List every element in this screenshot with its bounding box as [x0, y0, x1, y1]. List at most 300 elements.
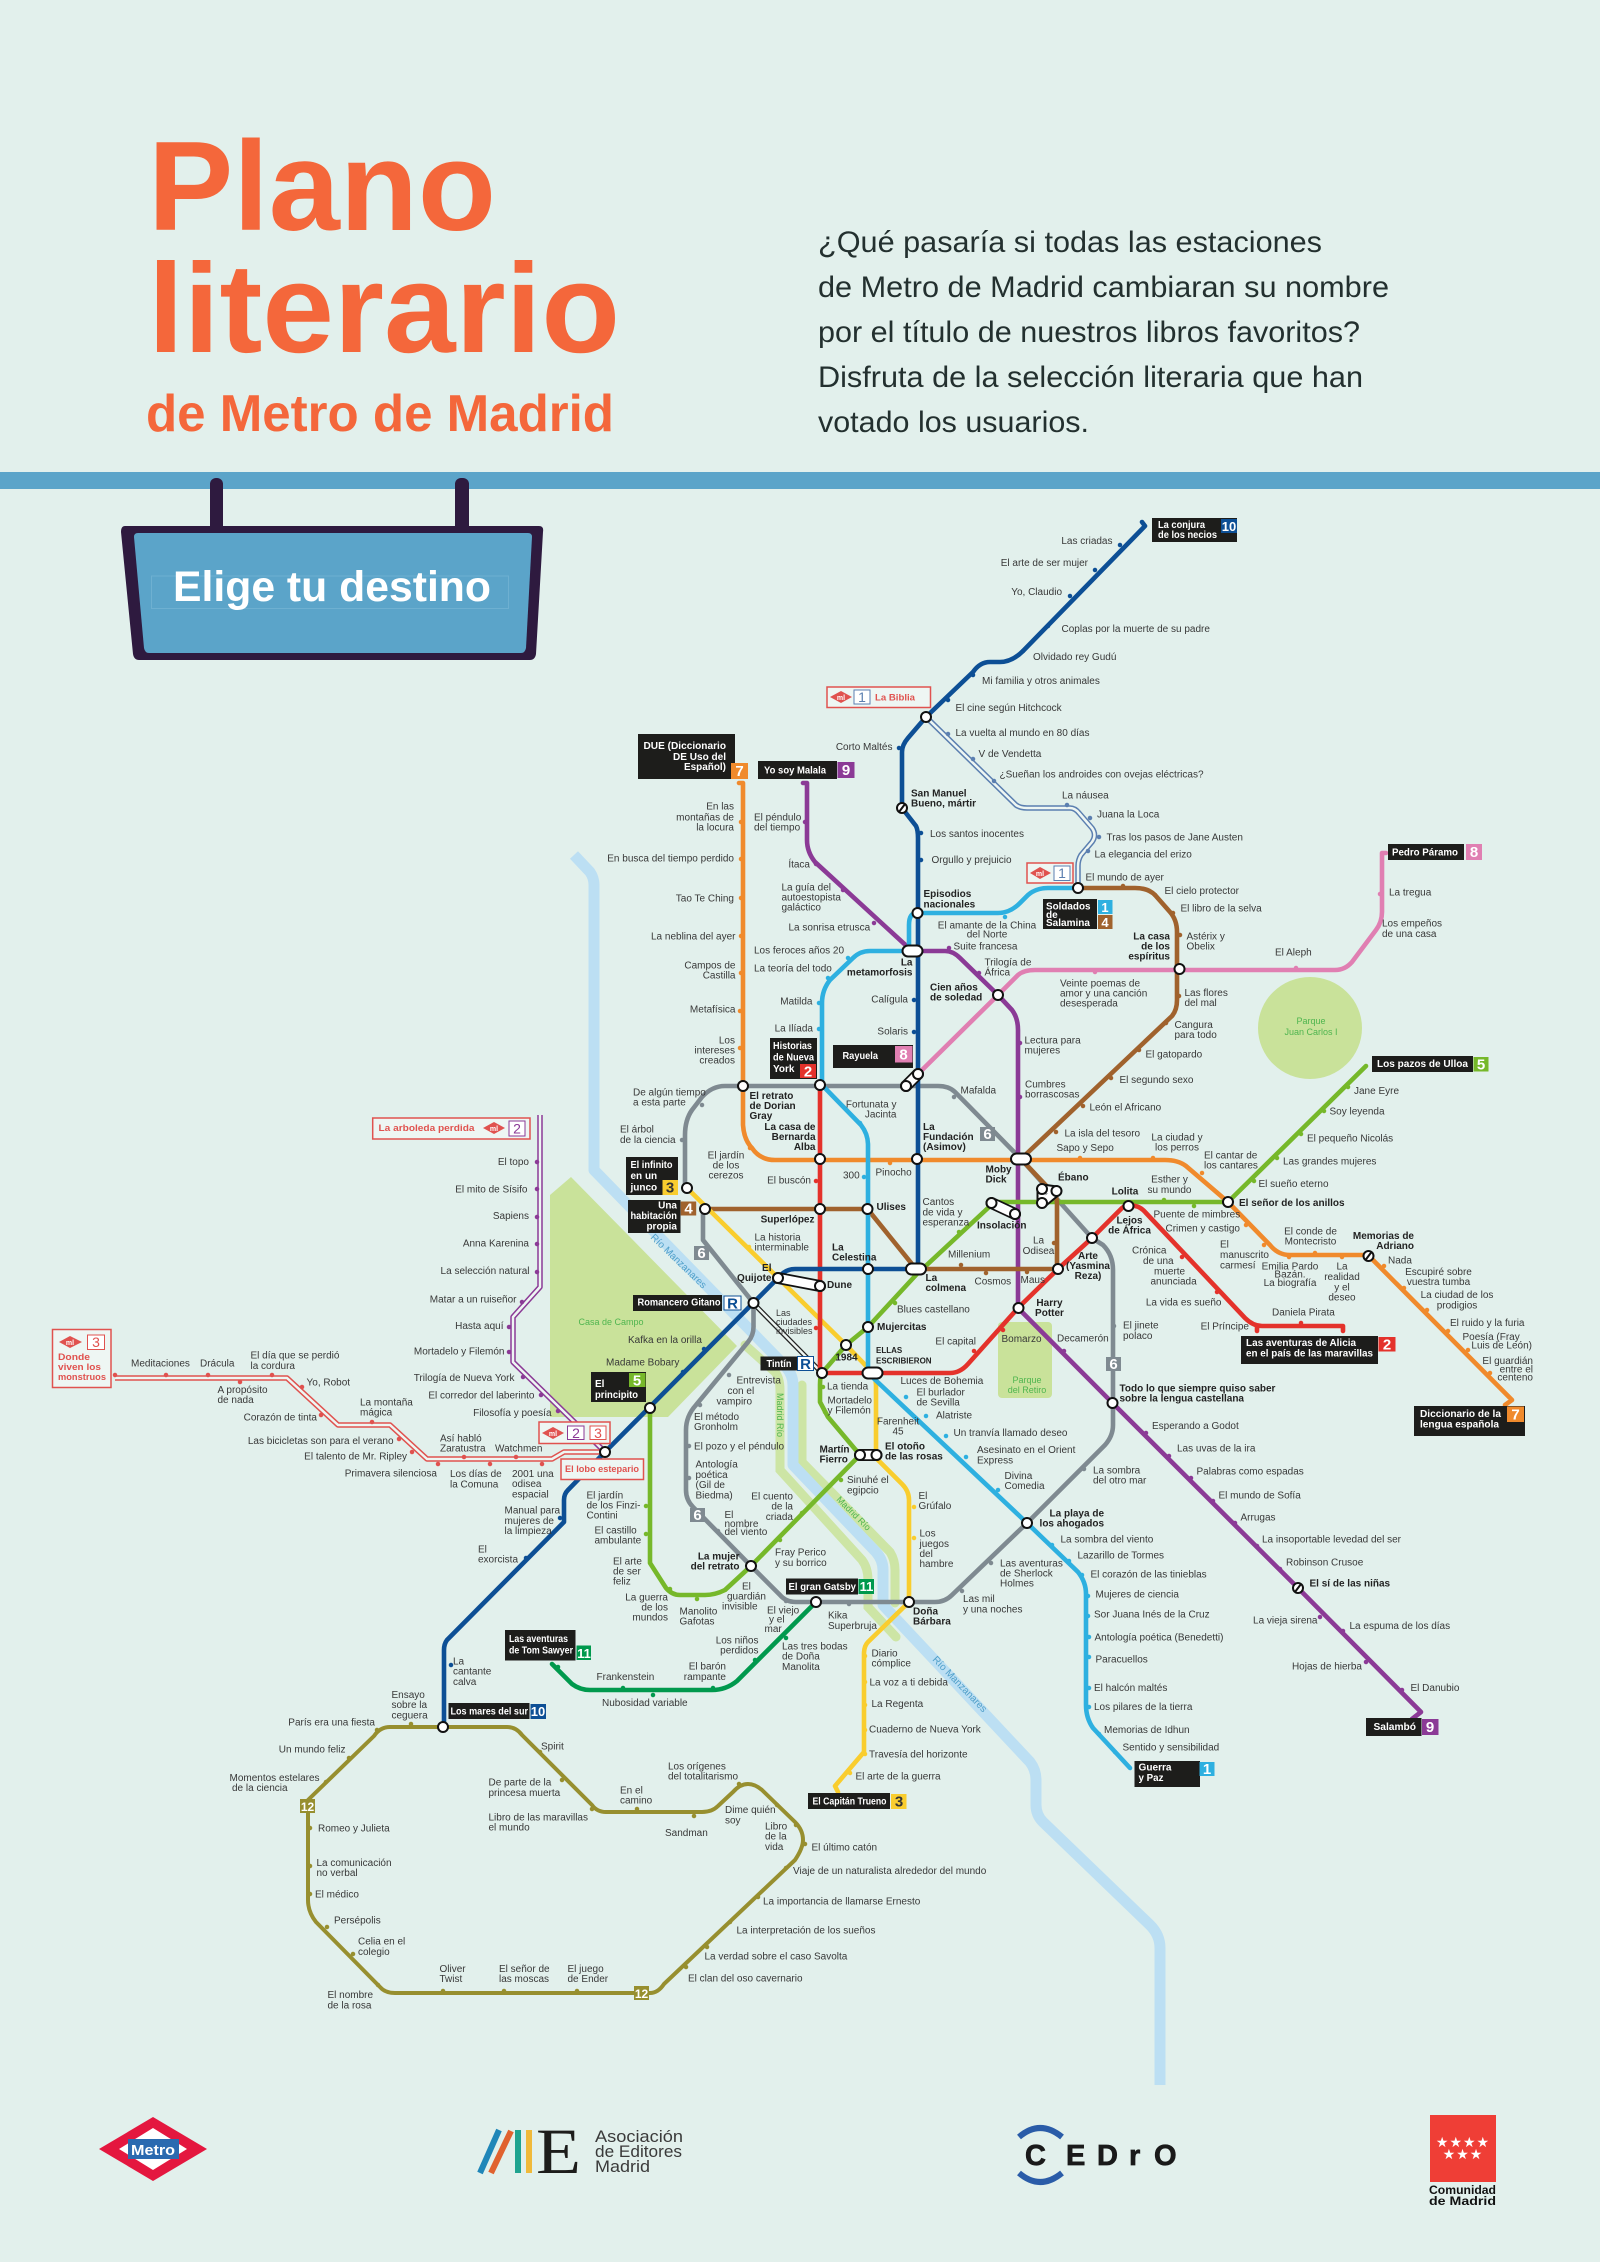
station names: north lines: Lectura para [1024, 1036, 1081, 1046]
transfer label: Una habitacion propia: propia [646, 1222, 677, 1232]
terminal label: DUE [638, 734, 748, 780]
station names: north lines: En las [706, 802, 734, 812]
station names: bold central: Ébano [1058, 1170, 1089, 1184]
station names: north lines: Juana la Loca [1097, 810, 1160, 820]
line 1 light blue [822, 888, 1130, 1768]
station names: north lines: Tao Te Ching [676, 894, 734, 904]
station names: north lines: El libro de la selva [1180, 904, 1262, 914]
station names: bold north: La casa [1133, 932, 1170, 942]
station names: east: Poesía (Fray [1462, 1332, 1520, 1343]
station names: bold central: los ahogados [1040, 1518, 1104, 1530]
station names: line 12: París era una fiesta [288, 1718, 375, 1728]
station names: central area: Odisea [1023, 1246, 1055, 1257]
station names: central area: Gafotas [680, 1616, 715, 1628]
station names: north lines: Los santos inocentes [930, 829, 1024, 840]
station names: branch ML3: El talento de Mr. Ripley [304, 1452, 407, 1462]
station names: east: polaco [1123, 1331, 1153, 1342]
terminal label: Donde viven los monstruos: Donde [58, 1352, 90, 1363]
terminal label: Las aventuras de Alicia: 2 [1383, 1336, 1391, 1354]
station names: east: Luis de León) [1471, 1340, 1532, 1352]
terminal label: Pedro Paramo [1388, 844, 1482, 861]
blue header band [0, 472, 1600, 489]
station names: east: Memorias de Idhun [1104, 1725, 1190, 1736]
station names: bold central: sobre la lengua castellana [1120, 1394, 1244, 1404]
terminal label: Guerra y Paz: Guerra [1138, 1762, 1172, 1774]
station names: branch ML3: de nada [218, 1395, 254, 1406]
station names: central area: Antología [696, 1460, 738, 1470]
station names: north lines: Obelix [1186, 942, 1215, 952]
station names: central area: Las tres bodas [782, 1642, 848, 1652]
station names: bold north: La [901, 958, 913, 968]
station names: line 12: ceguera [392, 1710, 428, 1722]
station names: bold central: El señor de los anillos [1239, 1198, 1345, 1209]
line 2 red [820, 1085, 1343, 1373]
terminal label: Donde viven los monstruos: viven los [58, 1362, 101, 1373]
station names: bold central: Dune [827, 1280, 852, 1291]
station names: east: anunciada [1150, 1276, 1197, 1288]
station names: north lines: Matilda [780, 996, 813, 1008]
station names: central area: nombre [724, 1519, 759, 1530]
station names: east: Robinson Crusoe [1286, 1558, 1364, 1568]
station names: east: Jane Eyre [1354, 1086, 1399, 1097]
terminal label: DUE: Español) [684, 762, 726, 773]
terminal label: Diccionario de la lengua [1414, 1406, 1525, 1436]
terminal label: Donde viven los monstruos: 3 [92, 1334, 100, 1350]
station names: bold central: La casa de [764, 1122, 816, 1133]
station names: line 12: Sandman [665, 1828, 708, 1839]
station names: branch ML3: odisea [512, 1479, 542, 1490]
station names: north lines: Cangura [1174, 1020, 1213, 1031]
terminal label: Pedro Paramo: Pedro Páramo [1392, 848, 1458, 858]
station names: branch ML3: Los días de [450, 1469, 502, 1480]
station names: central area: Luces de Bohemia [900, 1376, 984, 1387]
station names: east: La [1336, 1262, 1348, 1272]
intro text: ¿Qué pasaría si todas las estaciones [818, 226, 1322, 259]
station names: east: manuscrito [1220, 1250, 1269, 1261]
station names: central area: interminable [754, 1242, 809, 1254]
ramal ML1 double line [926, 717, 1094, 888]
station names: central area: egipcio [847, 1486, 879, 1496]
station names: central area: Manual para [504, 1506, 561, 1516]
station names: bold central: Lejos [1116, 1216, 1143, 1226]
station names: north lines: del tiempo [754, 822, 801, 834]
station names: north lines: La teoría del todo [754, 964, 832, 974]
station names: east: El cantar de [1204, 1150, 1258, 1162]
station names: line 12: del totalitarismo [668, 1772, 738, 1782]
terminal label: El gran Gatsby: 11 [860, 1579, 873, 1594]
terminal label: La conjura de los necios: La conjura [1158, 520, 1205, 531]
station names: north lines: mujeres [1024, 1046, 1060, 1056]
line 5 light green [650, 1066, 1366, 1595]
station names: bold north [847, 788, 1170, 1004]
station names: central area: de ser [613, 1566, 641, 1578]
station names: central area: Entrevista [736, 1376, 781, 1386]
station names: east [963, 1086, 1533, 1754]
station names: branch ML2: Anna Karenina [463, 1238, 529, 1250]
transfer label: Una habitacion propia: Una [658, 1200, 677, 1212]
station names: line 12: La interpretación de los sueños [736, 1926, 875, 1936]
logo: Comunidad de Madrid: ★★★ [1443, 2147, 1483, 2163]
logo: Comunidad de Madrid: de Madrid [1429, 2196, 1496, 2208]
terminal label: La conjura de los necios: de los necios [1158, 530, 1217, 541]
station names: branch ML3: Corazón de tinta [244, 1412, 317, 1424]
station names: central area: El árbol [620, 1124, 654, 1136]
ramal ML2 double line [513, 1115, 603, 1450]
logo: Metro: Metro [131, 2142, 175, 2159]
title: Plano [148, 115, 496, 257]
station names: line 12: Viaje de un naturalista alrededor del mundo [793, 1866, 987, 1877]
terminal label: Tintin: R [800, 1356, 811, 1373]
terminal label: Guerra y Paz: y Paz [1138, 1773, 1164, 1784]
station names: central area: Decamerón [1057, 1334, 1109, 1344]
station names: east: El Danubio [1410, 1683, 1460, 1694]
station names: bold central: La [923, 1122, 935, 1133]
station names: bold central: Mujercitas [877, 1322, 927, 1333]
station names: central area: Jacinta [865, 1110, 897, 1120]
station names: north lines: montañas de [676, 812, 734, 824]
terminal label: El principito [591, 1372, 646, 1402]
station names: central area: mundos [632, 1612, 668, 1624]
station names: bold central: ESCRIBIERON [876, 1356, 932, 1366]
station names: bold central: (Yasmina [1066, 1261, 1110, 1272]
station names: north lines: borrascosas [1025, 1090, 1079, 1100]
station names: branch ML3: mágica [360, 1408, 393, 1418]
park: Retiro [998, 1322, 1052, 1398]
transfer label: Una habitacion propia: habitación [630, 1211, 677, 1222]
station names: east: El jinete [1123, 1320, 1159, 1332]
logo: Asociacion de Editores Madrid: de Editores [595, 2142, 682, 2161]
station names: bold north: de los [1141, 942, 1170, 952]
terminal label: El Capitan Trueno: 3 [895, 1794, 903, 1810]
station names: central area: La Regenta [872, 1699, 924, 1710]
park: Retiro: Parque [1012, 1375, 1042, 1385]
line 9 purple [803, 783, 1421, 1719]
station names: central area: El barón [689, 1662, 726, 1672]
terminal label: Los mares del sur: Los mares del sur [450, 1706, 528, 1718]
station names: branch ML3: Las bicicletas son para el verano [248, 1436, 394, 1447]
station names: east: Puente de mimbres [1154, 1210, 1240, 1220]
station names: north lines: Olvidado rey Gudú [1033, 652, 1116, 663]
station names: line 12: camino [620, 1796, 653, 1806]
station names: bold north: de soledad [930, 992, 982, 1004]
station names: bold central: La [832, 1242, 844, 1254]
station names: branch ML2: Sapiens [493, 1211, 529, 1222]
station names: central area: Diario [872, 1648, 898, 1660]
station names: east: Antología poética (Benedetti) [1094, 1632, 1223, 1644]
station names: east: Holmes [1000, 1578, 1034, 1590]
logo: Metro [99, 2117, 207, 2181]
station names: central area: perdidos [720, 1646, 758, 1656]
logo: Comunidad de Madrid: ★★★★ [1436, 2135, 1490, 2151]
station names: central area: de los [713, 1160, 739, 1172]
transfer label: El lobo estepario [561, 1459, 644, 1480]
terminal label: Las aventuras de Alicia: Las aventuras de Alicia [1246, 1338, 1356, 1349]
station names: line 12: Celia en el [358, 1936, 405, 1948]
station names: east: La espuma de los días [1350, 1621, 1450, 1632]
transfer label: La Biblia: 1 [858, 689, 866, 705]
terminal label: Salambo [1366, 1718, 1438, 1736]
transfer label: ML2 ML3: 2 [572, 1425, 580, 1441]
station names: north lines: El arte de ser mujer [1001, 558, 1089, 569]
station names: central area: invisibles [776, 1326, 813, 1336]
station names: central area: El buscón [767, 1176, 811, 1186]
station names: branch ML3: A propósito [218, 1385, 268, 1396]
station names: central area: Grúfalo [918, 1501, 952, 1512]
station names: line 12: Oliver [440, 1964, 466, 1975]
station names: central area: a esta parte [633, 1098, 686, 1108]
station names: line 12: Momentos estelares [230, 1773, 320, 1784]
station names: central area: Fortunata y [846, 1100, 896, 1110]
station names: east: El halcón maltés [1094, 1683, 1167, 1694]
transfer label: El infinito en un junco [626, 1157, 678, 1196]
station names: central area: 300 [843, 1170, 860, 1182]
terminal label: Los pazos de Ulloa: 5 [1477, 1056, 1485, 1074]
station names: bold central: (Asimov) [923, 1142, 966, 1153]
station names: bold north: Cien años [930, 982, 978, 994]
station names: north lines [607, 536, 1442, 1140]
station names: line 12: de la rosa [328, 2000, 372, 2012]
station names: bold north: metamorfosis [847, 968, 913, 978]
station names: central area: mar [764, 1624, 782, 1635]
station names: line 12: princesa muerta [488, 1788, 561, 1799]
station names: bold central: El retrato [750, 1091, 793, 1102]
terminal label: La arboleda perdida: ml [490, 1126, 498, 1133]
terminal label: Yo soy Malala: Yo soy Malala [764, 766, 826, 776]
station names: north lines: La guía del [782, 882, 831, 894]
logo: Asociacion de Editores Madrid: E [536, 2116, 581, 2188]
line number badges 6 and 12: 6 [693, 1507, 702, 1524]
logo: Asociacion de Editores Madrid [480, 2116, 683, 2188]
station names: line 12: Spirit [541, 1742, 564, 1752]
station connectors [778, 1074, 1056, 1455]
station names: line 12: soy [725, 1816, 741, 1826]
terminal label: Guerra y Paz [1134, 1761, 1214, 1787]
station ticks by line [115, 545, 1490, 1991]
station names: central area: Cuaderno de Nueva York [869, 1724, 982, 1736]
station names: bold central: Memorias de [1353, 1231, 1414, 1242]
station names: east: los perros [1155, 1142, 1199, 1154]
station names: bold north: espíritus [1128, 952, 1170, 962]
station names: north lines: Veinte poemas de [1060, 978, 1140, 990]
sign: Elige tu destino [121, 478, 543, 660]
station names: central area: Sinuhé el [847, 1475, 889, 1486]
station names: line 12: Romeo y Julieta [318, 1824, 390, 1834]
station names: east: Arrugas [1240, 1512, 1276, 1524]
station names: central area: 45 [892, 1426, 904, 1438]
station names: north lines: Corto Maltés [836, 742, 892, 753]
station names: north lines: León el Africano [1090, 1102, 1162, 1114]
station names: central area: Alatriste [936, 1410, 973, 1422]
station names: north lines: Metafísica [690, 1004, 736, 1016]
transfer label: Soldados de Salamina: Soldados [1046, 902, 1091, 912]
station names: bold central: del retrato [691, 1562, 740, 1572]
line number badges 6 and 12: 6 [697, 1245, 706, 1262]
station names: east: Nada [1388, 1256, 1412, 1266]
transfer label: ML1: ml [1036, 871, 1044, 878]
station names: east: muerte [1154, 1266, 1186, 1278]
line number badges 6 and 12 [300, 1126, 1121, 2001]
station names: bold central: 1984 [835, 1352, 858, 1364]
station names: east: La sombra del viento [1060, 1534, 1154, 1546]
station names: central area: Mafalda [960, 1086, 997, 1096]
station names: bold central: Harry [1036, 1298, 1063, 1309]
station names: north lines: amor y una canción [1060, 988, 1147, 1000]
station names: east: Lazarillo de Tormes [1078, 1550, 1164, 1562]
river and Madrid Rio labels: Río Manzanares [648, 1232, 708, 1291]
station names: east: vuestra tumba [1407, 1277, 1471, 1288]
station names: bold central: Arte [1078, 1251, 1098, 1262]
station names: branch ML2: Mortadelo y Filemón [414, 1346, 504, 1358]
transfer label: La Biblia: ml [837, 695, 845, 702]
terminal label: Romancero Gitano [633, 1295, 741, 1312]
station names: central area: vampiro [716, 1396, 753, 1408]
terminal label: Yo soy Malala [758, 761, 854, 779]
station names: north lines: ¿Sueñan los androides con ovejas eléctricas? [1000, 770, 1204, 780]
station names: east: Crimen y castigo [1166, 1224, 1240, 1234]
station names: north lines: intereses [694, 1046, 735, 1056]
park: Juan Carlos I: Juan Carlos I [1284, 1027, 1338, 1037]
station names: bold central: Gray [750, 1111, 773, 1122]
station names: north lines: Yo, Claudio [1011, 587, 1062, 598]
station names: east: Escupiré sobre [1405, 1267, 1472, 1278]
station names: line 12: de Ender [568, 1974, 609, 1985]
station names: line 12: La verdad sobre el caso Savolta [704, 1952, 848, 1962]
station names: east: El conde de [1284, 1226, 1337, 1238]
station names: central area: El método [694, 1412, 739, 1423]
transfer label: Soldados de Salamina: 1 [1101, 900, 1109, 915]
line 8 pink [918, 853, 1386, 1074]
station names: east: los cantares [1204, 1160, 1258, 1172]
logo: CEDRO [1019, 2128, 1177, 2182]
station names: central area: de vida y [922, 1208, 963, 1218]
station names: north lines: desesperada [1060, 998, 1118, 1010]
title [146, 115, 620, 443]
transfer label: La Biblia [827, 687, 930, 708]
terminal label: Diccionario de la lengua: 7 [1511, 1406, 1520, 1424]
station names: north lines: Coplas por la muerte de su padre [1062, 624, 1210, 635]
transfer label: Soldados de Salamina: de [1046, 910, 1058, 921]
station names: central area: Comedia [1004, 1481, 1045, 1492]
station names: bold central: Moby [986, 1164, 1012, 1176]
station names: bold central: colmena [926, 1283, 967, 1294]
station names: east: Esther y [1151, 1174, 1188, 1186]
station names: north lines: del Norte [967, 930, 1008, 940]
station names: bold central: El [762, 1263, 772, 1274]
station names: north lines: La sonrisa etrusca [788, 922, 871, 934]
terminal label: El gran Gatsby [786, 1578, 874, 1594]
terminal label: Donde viven los monstruos: monstruos [58, 1372, 106, 1383]
station names: east: realidad [1324, 1272, 1360, 1283]
park: Juan Carlos I [1258, 977, 1362, 1079]
terminal label: DUE: 7 [735, 763, 744, 780]
station names: line 12: Ensayo [392, 1690, 425, 1701]
station names: central area: Kika [828, 1610, 848, 1622]
station names: central area: El cuento [751, 1492, 793, 1502]
station names: north lines: El cielo protector [1164, 886, 1240, 897]
station names: central area: (Gil de [696, 1480, 725, 1491]
park: Casa de Campo [550, 1177, 737, 1417]
station names: line 12: Twist [440, 1974, 462, 1985]
station names: bold central: Bárbara [913, 1616, 951, 1628]
terminal label: La conjura de los necios [1152, 518, 1237, 542]
station names: north lines: África [984, 966, 1010, 978]
station names: east: Sentido y sensibilidad [1122, 1742, 1219, 1754]
station names: bold central: Martín [820, 1444, 850, 1456]
station names: central area: Biedma) [696, 1490, 733, 1502]
title: literario [148, 237, 620, 379]
station names: bold central [691, 1091, 1414, 1628]
station names: central area: El jardín [708, 1150, 744, 1162]
station names: central area: hambre [920, 1559, 954, 1570]
station names: branch ML3: la Comuna [450, 1480, 499, 1490]
terminal label: Rayuela [833, 1045, 913, 1068]
station names: bold central: Dick [986, 1174, 1007, 1186]
station names: central area: Fray Perico [775, 1548, 827, 1558]
terminal label: Salambo: 9 [1426, 1719, 1434, 1736]
terminal label: Tintin: Tintín [766, 1359, 792, 1370]
station names: north lines: Tras los pasos de Jane Austen [1106, 832, 1243, 844]
station names: east: centeno [1497, 1372, 1533, 1384]
station names: line 12: las moscas [499, 1974, 549, 1985]
station names: central area: rampante [684, 1672, 726, 1683]
Madrid Rio park strips [745, 1345, 896, 1637]
station names: central area: con el [728, 1386, 754, 1397]
station names: central area: criada [766, 1512, 793, 1523]
terminal label: Las aventuras de Alicia: en el país de las maravillas [1246, 1348, 1373, 1360]
terminal label: Las aventuras de Tom Sawyer [505, 1630, 591, 1661]
station names: east: Emilia Pardo [1262, 1262, 1319, 1272]
station names: east: entre el [1500, 1364, 1533, 1376]
station names: central area: invisible [722, 1602, 758, 1612]
transfer label: Historias de Nueva York: 2 [804, 1064, 812, 1080]
transfer label: El lobo estepario: El lobo estepario [565, 1464, 639, 1475]
transfer label: ML2 ML3: ml [549, 1431, 557, 1438]
station names: central area: cómplice [872, 1658, 911, 1670]
station names: bold central: de África [1108, 1224, 1151, 1236]
station names: north lines: En busca del tiempo perdido [607, 854, 734, 864]
station names: branch ML2: Matar a un ruiseñor [430, 1294, 517, 1306]
station names: branch ML2: El mito de Sísifo [455, 1184, 528, 1196]
station names: central area: y Filemón [828, 1406, 871, 1416]
station names: bold central: El sí de las niñas [1310, 1578, 1391, 1590]
station names: branch ML3: 2001 una [512, 1469, 554, 1480]
terminal label: La arboleda perdida: 2 [513, 1120, 521, 1136]
station names: east: El corazón de las tinieblas [1090, 1570, 1207, 1580]
station names: east: Montecristo [1285, 1236, 1337, 1248]
station names: central area: Pinocho [876, 1168, 912, 1178]
station names: line 12: Libro [765, 1822, 788, 1832]
station names: line 12: La importancia de llamarse Ernesto [763, 1896, 921, 1908]
station names: bold central: Alba [794, 1142, 816, 1153]
transfer label: El infinito en un junco: en un [630, 1171, 657, 1182]
station names: central area: Los niños [716, 1636, 758, 1646]
station names: east: Daniela Pirata [1272, 1308, 1335, 1318]
station names: bold north: San Manuel [911, 788, 967, 800]
sign: Elige tu destino: Elige tu destino [173, 563, 491, 611]
station names: bold central: Quijote [737, 1273, 772, 1284]
line 7 orange [739, 783, 1512, 1405]
station names: central area: esperanza [922, 1218, 970, 1228]
station names: branch ML3: Zaratustra [440, 1444, 486, 1454]
station names: line 12: sobre la [392, 1700, 428, 1711]
station names: central area: De algún tiempo [633, 1088, 706, 1098]
terminal label: Los mares del sur [448, 1703, 546, 1719]
station names: east: Sapo y Sepo [1056, 1143, 1114, 1154]
station names: north lines: El Aleph [1275, 948, 1312, 958]
station names: branch ML3: Primavera silenciosa [345, 1468, 437, 1480]
station names: central area: de Doña [782, 1652, 820, 1662]
station names: bold central: Ulises [876, 1202, 906, 1213]
